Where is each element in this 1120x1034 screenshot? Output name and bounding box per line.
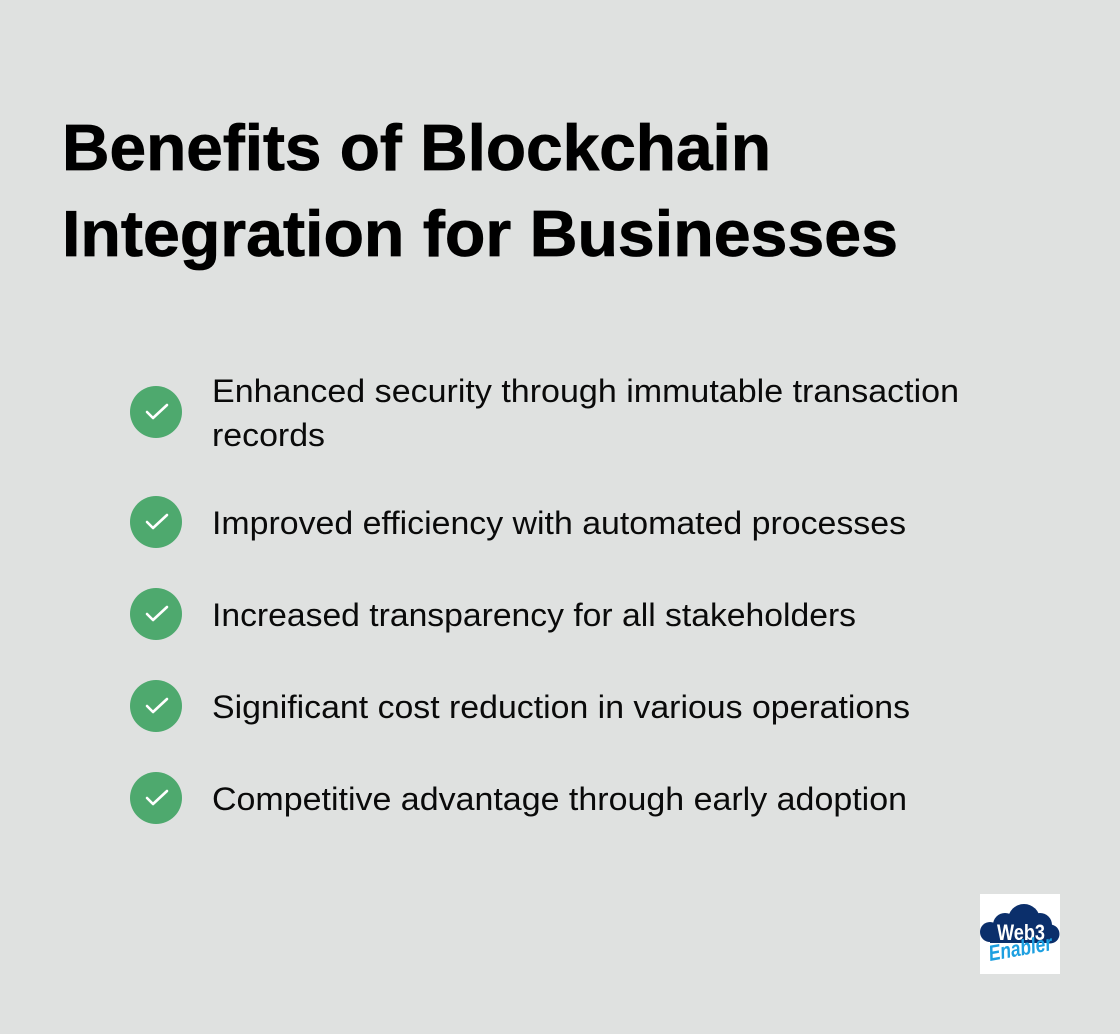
item: competitive advantage: Competitive advantage through early adoption: [212, 781, 907, 817]
logo: Web3 Enabler: Web3: [997, 920, 1045, 945]
item: competitive advantage: [130, 772, 907, 824]
item: cost reduction: [130, 680, 910, 732]
item: increased transparency: Increased transparency for all stakeholders: [212, 597, 856, 633]
item: cost reduction: Significant cost reduction in various operations: [212, 689, 910, 725]
title: Integration for Businesses: [62, 197, 898, 270]
benefits list: [130, 373, 959, 824]
item: enhanced security: [130, 373, 959, 453]
item: improved efficiency: Improved efficiency with automated processes: [212, 505, 906, 541]
logo: Web3 Enabler: [980, 894, 1060, 974]
title: Benefits of Blockchain: [62, 111, 771, 184]
item: increased transparency: [130, 588, 856, 640]
logo cloud: [980, 904, 1060, 944]
item: enhanced security: records: [212, 417, 325, 453]
item: enhanced security: Enhanced security through immutable transaction: [212, 373, 959, 409]
logo: Web3 Enabler: Enabler: [987, 930, 1055, 966]
item: improved efficiency: [130, 496, 906, 548]
title: [62, 111, 898, 270]
